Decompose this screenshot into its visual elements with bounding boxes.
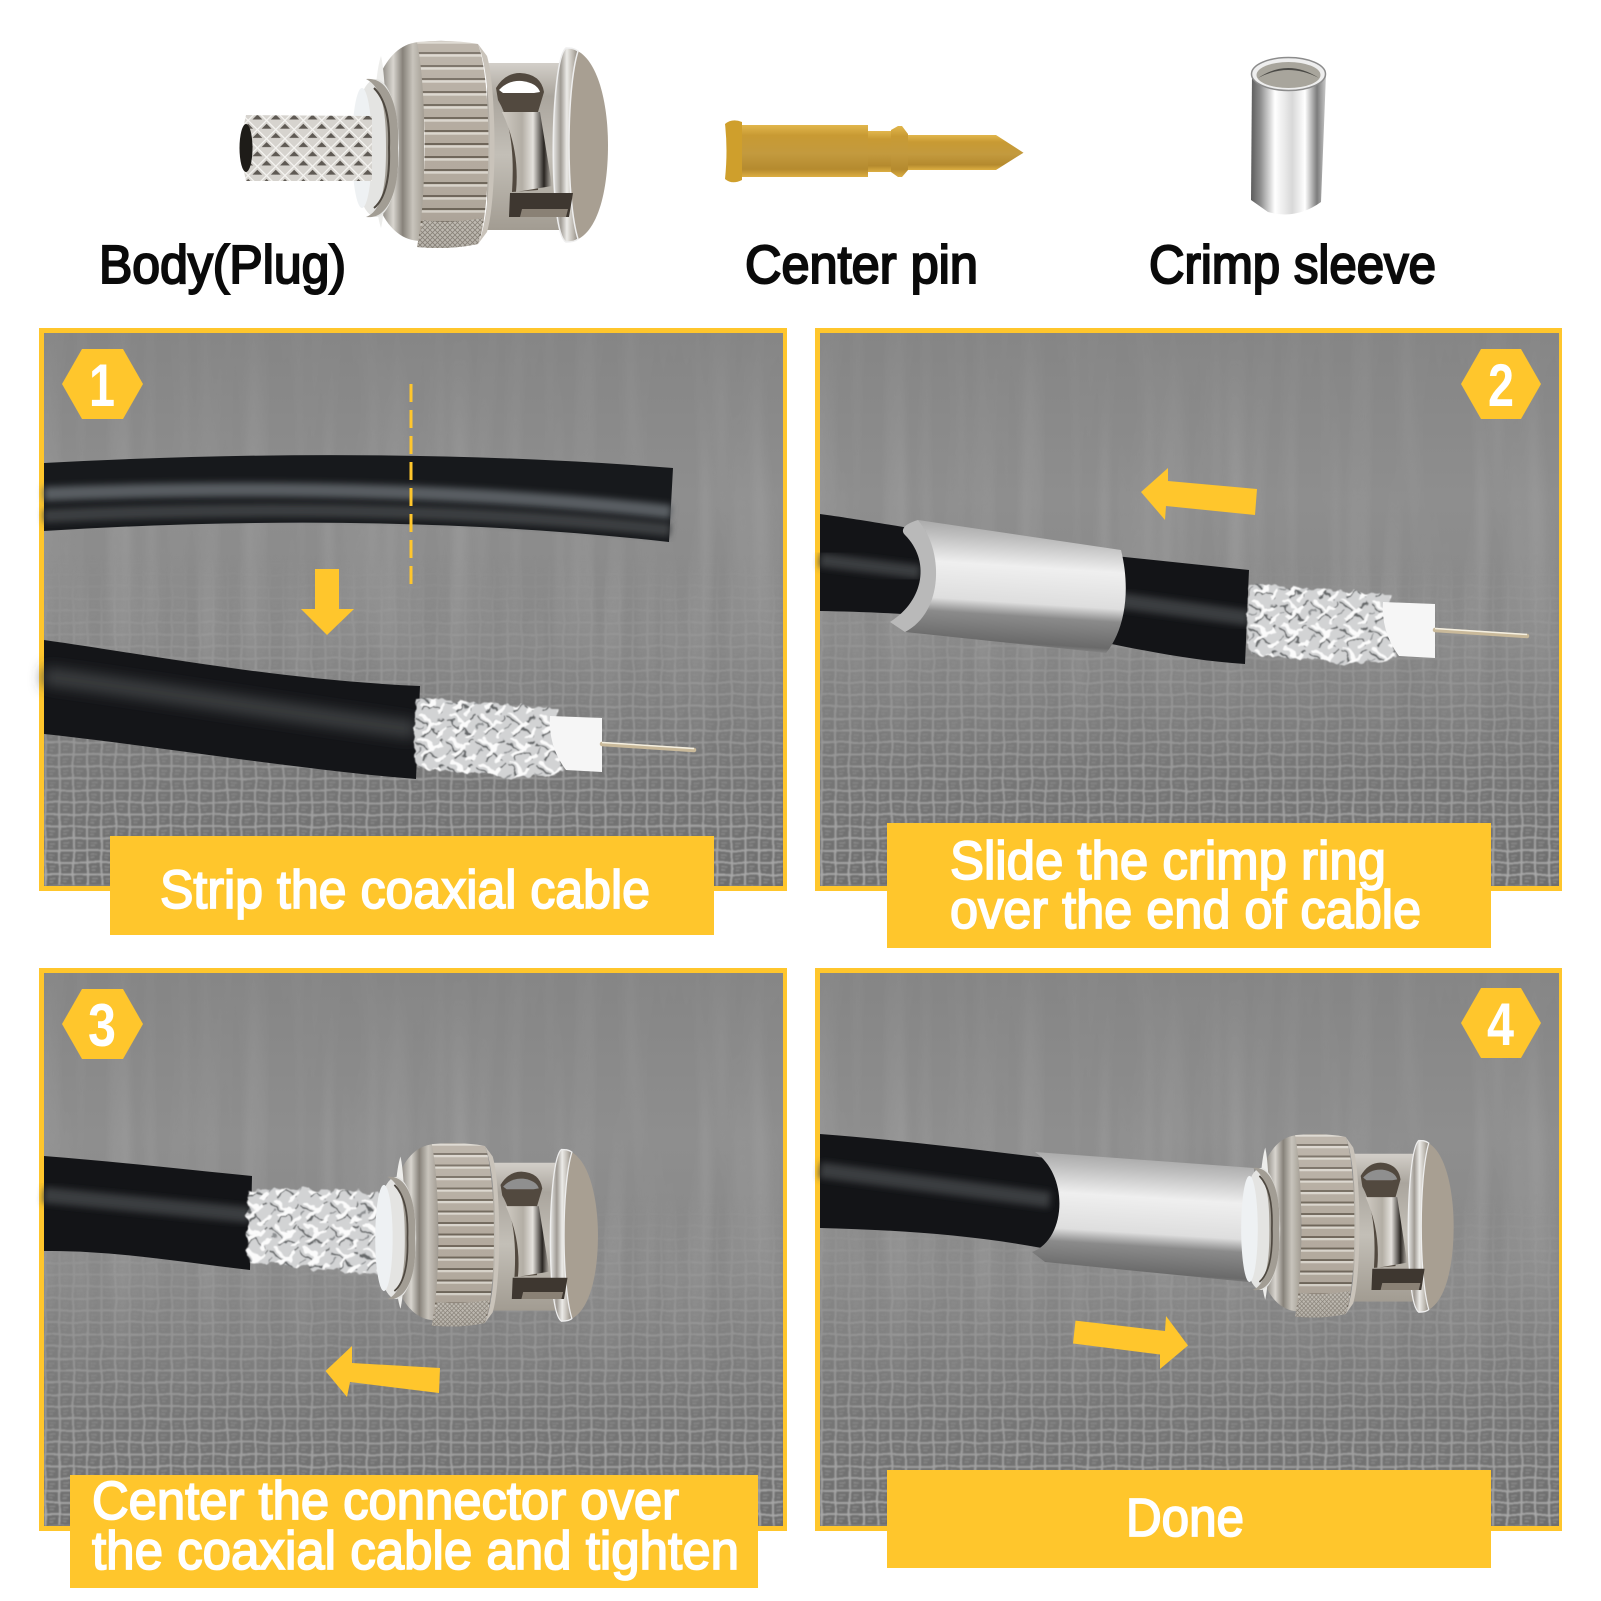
caption 2: Slide the crimp ring [950, 831, 1386, 891]
badge 2: 2 [1488, 352, 1514, 419]
cable with sleeve [820, 514, 1527, 664]
panel: step 1 strip the coaxial cable [39, 328, 787, 935]
badge 1 [62, 349, 143, 419]
badge 3 [62, 989, 143, 1059]
arrow: down [301, 569, 354, 635]
label: Crimp sleeve: Crimp sleeve [1149, 235, 1436, 295]
caption 1 [110, 836, 714, 935]
badge 3: 3 [88, 992, 116, 1059]
assembled cable [820, 1134, 1454, 1317]
panel: step 2 slide the crimp ring [815, 328, 1562, 948]
panel: step 3 center the connector [39, 968, 787, 1588]
part: center pin [725, 120, 1024, 182]
panel: step 4 done [815, 968, 1562, 1568]
caption 2 [887, 823, 1491, 948]
part: body plug connector [240, 41, 608, 248]
arrow: left [326, 1346, 440, 1397]
caption 2: over the end of cable [950, 880, 1421, 940]
caption 3 [70, 1471, 758, 1588]
cable and connector [44, 1143, 598, 1326]
badge 4 [1461, 988, 1541, 1058]
part: crimp sleeve [1251, 58, 1326, 214]
stripped cable [44, 640, 694, 779]
full cable with cut line [44, 455, 673, 542]
caption 4: Done [1126, 1488, 1244, 1548]
caption 4 [887, 1470, 1491, 1568]
caption 3: Center the connector over [92, 1471, 679, 1531]
label: Center pin: Center pin [745, 235, 978, 295]
caption 3: the coaxial cable and tighten [92, 1521, 739, 1581]
caption 1: Strip the coaxial cable [160, 860, 650, 920]
knurled stub [240, 115, 372, 181]
arrow: right [1073, 1316, 1188, 1369]
arrow: left [1141, 468, 1257, 520]
crimp ring sleeve [890, 520, 1126, 653]
dashed cut line [410, 384, 412, 586]
label: Body(Plug): Body(Plug) [99, 235, 346, 295]
badge 4: 4 [1487, 991, 1515, 1058]
badge 1: 1 [89, 352, 115, 419]
badge 2 [1461, 349, 1541, 419]
crimp sleeve on cable [1032, 1152, 1258, 1283]
